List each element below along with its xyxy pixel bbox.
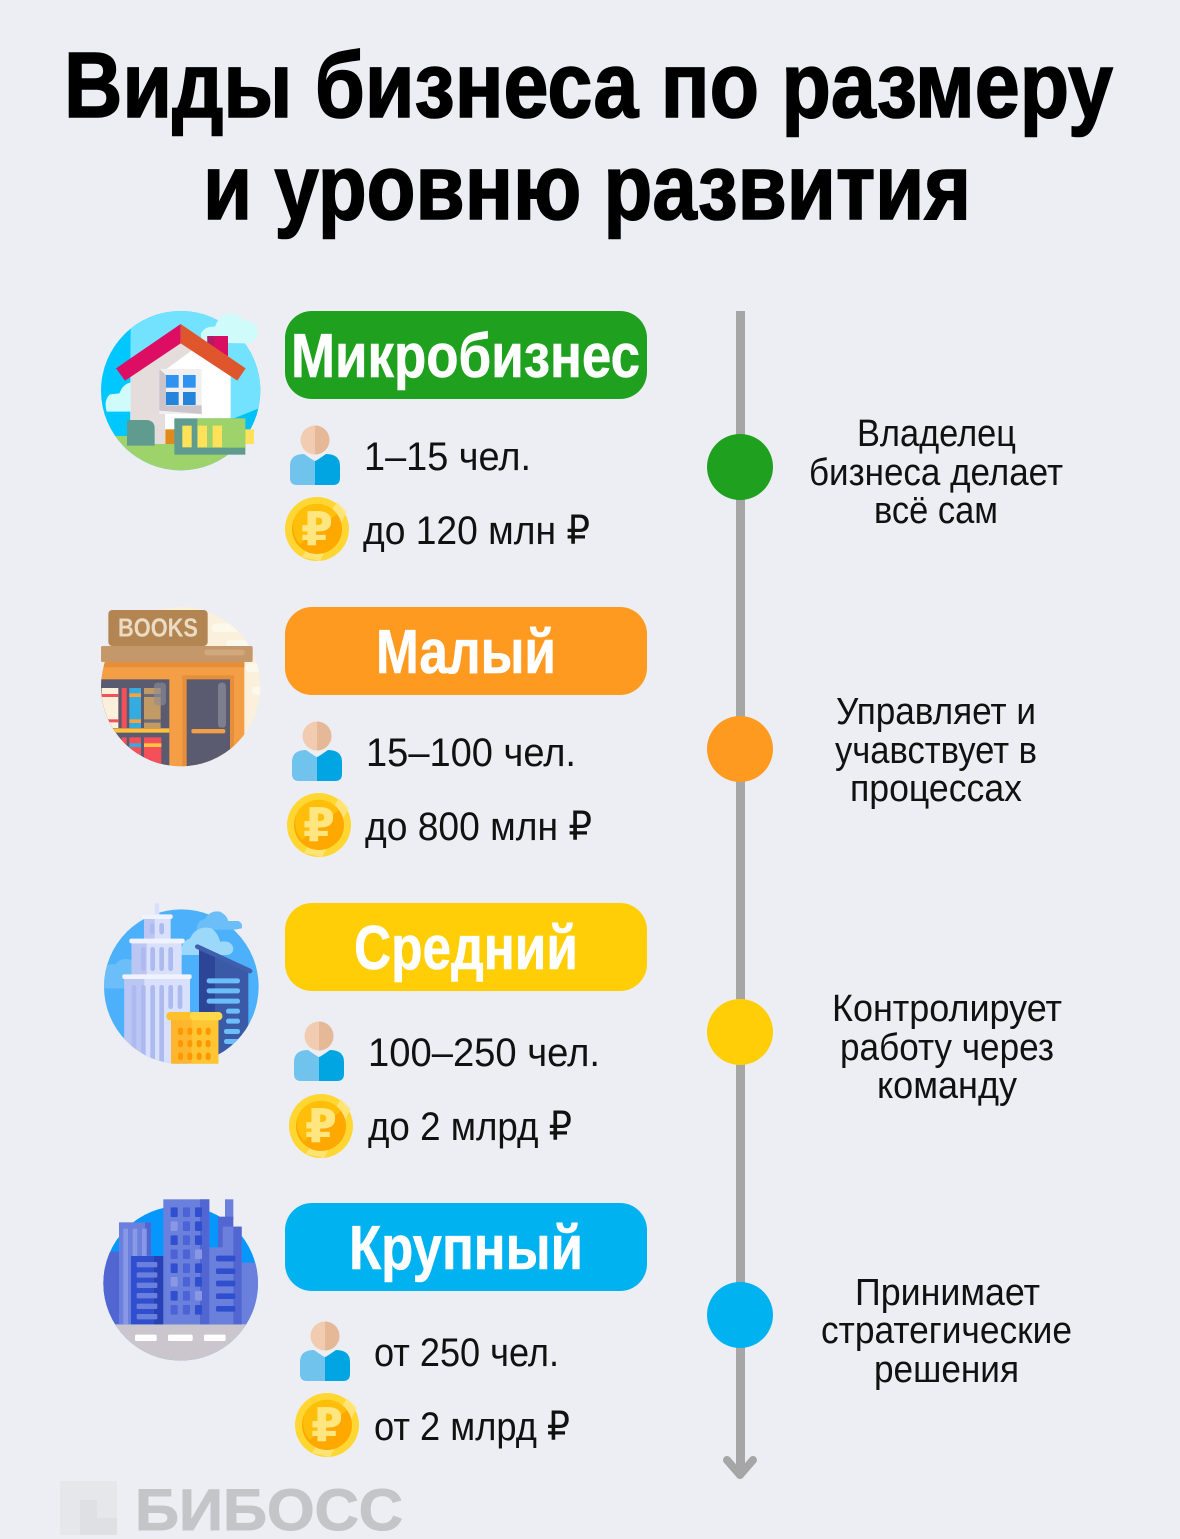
icon: person <box>292 722 342 781</box>
timeline arrow <box>727 311 753 1475</box>
icon: coin: ₽ <box>301 503 333 555</box>
description: малый <box>707 691 1037 810</box>
employees: 15–100 чел. <box>366 731 576 775</box>
icon: coin <box>285 497 349 561</box>
panel: микробизнес <box>285 311 647 561</box>
title <box>64 33 1113 239</box>
description: средний: команду <box>877 1065 1017 1107</box>
description: микробизнес: бизнеса делает <box>809 452 1063 494</box>
badge: средний: Средний <box>354 914 578 983</box>
panel: средний <box>285 903 647 1158</box>
revenue: до 120 млн ₽ <box>363 509 590 553</box>
revenue: до 800 млн ₽ <box>365 805 592 849</box>
icon: bookshop: BOOKS <box>118 613 198 643</box>
icon: bookshop <box>100 607 260 766</box>
panel: малый <box>285 607 647 857</box>
icon: coin <box>289 1094 353 1158</box>
description: крупный <box>707 1272 1072 1391</box>
description: средний <box>707 988 1062 1107</box>
description: средний: работу через <box>840 1027 1054 1069</box>
description: малый: процессах <box>850 768 1022 810</box>
icon: house <box>101 311 260 470</box>
panel: крупный <box>285 1203 647 1457</box>
badge: малый <box>285 607 647 695</box>
revenue: до 2 млрд ₽ <box>368 1105 572 1149</box>
badge: средний <box>285 903 647 991</box>
icon: city <box>103 1199 258 1361</box>
badge: крупный: Крупный <box>349 1214 583 1283</box>
icon: person <box>294 1022 344 1081</box>
icon: coin <box>295 1393 359 1457</box>
icon: coin: ₽ <box>305 1100 337 1152</box>
icon: person <box>300 1322 350 1381</box>
description: крупный: решения <box>874 1349 1019 1391</box>
description: крупный: Принимает <box>855 1272 1040 1314</box>
description: микробизнес: Владелец <box>857 413 1016 455</box>
badge: микробизнес: Микробизнес <box>291 322 640 391</box>
icon: coin: ₽ <box>303 799 335 851</box>
badge: крупный <box>285 1203 647 1291</box>
description: микробизнес <box>707 413 1063 532</box>
description: малый: учавствует в <box>835 730 1037 772</box>
icon: coin <box>287 793 351 857</box>
description: малый: Управляет и <box>836 691 1036 733</box>
badge: малый: Малый <box>376 618 556 687</box>
employees: 1–15 чел. <box>364 435 531 479</box>
revenue: от 2 млрд ₽ <box>374 1405 570 1449</box>
title: и уровню развития <box>203 135 971 239</box>
description: крупный: стратегические <box>821 1310 1072 1352</box>
badge: микробизнес <box>285 311 647 399</box>
description: средний: Контролирует <box>832 988 1062 1030</box>
icon: person <box>290 426 340 485</box>
description: микробизнес: всё сам <box>874 490 998 532</box>
icon: office towers <box>104 903 259 1064</box>
employees: 100–250 чел. <box>368 1031 600 1075</box>
icon: coin: ₽ <box>311 1399 343 1451</box>
employees: от 250 чел. <box>374 1331 559 1375</box>
